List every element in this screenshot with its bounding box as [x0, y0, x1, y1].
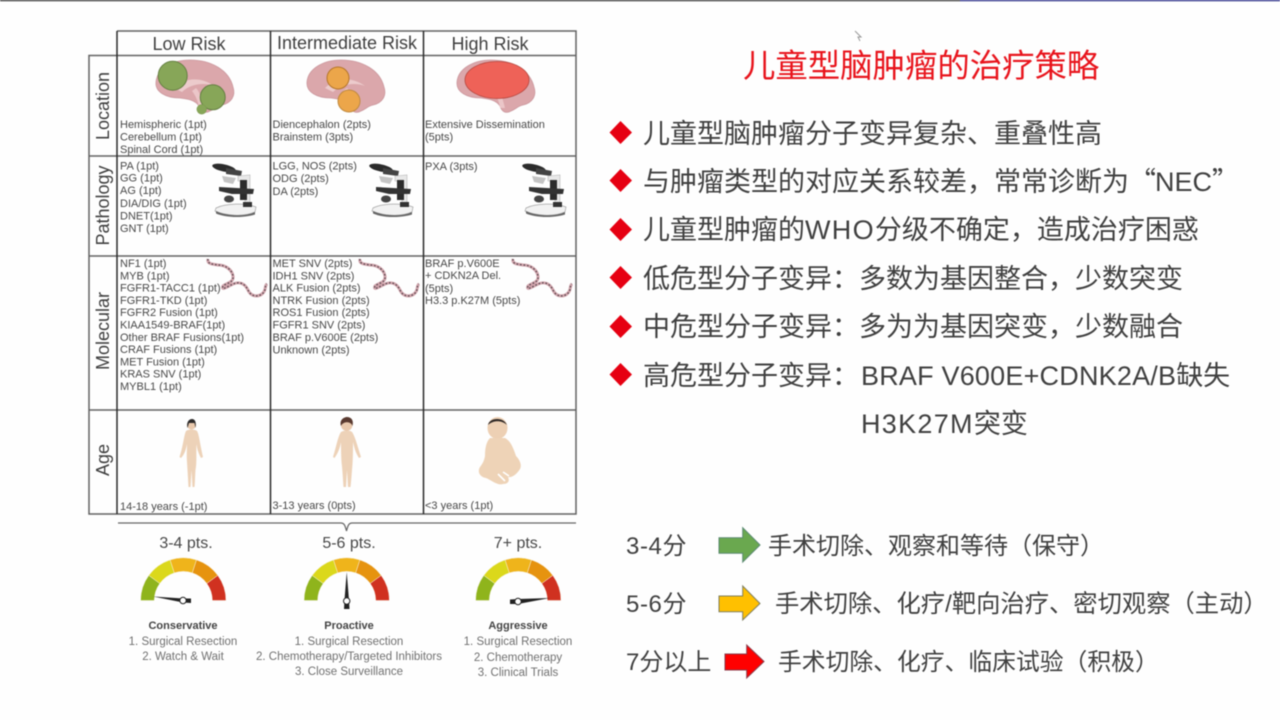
- text: molecular low: [120, 258, 244, 393]
- text: location low: Hemispheric (1pt): [120, 119, 207, 131]
- icon: child figure: [333, 417, 361, 487]
- bullet 6: [610, 361, 1230, 439]
- text: molecular intermediate: FGFR1 SNV (2pts): [272, 320, 365, 332]
- text: molecular intermediate: [272, 258, 378, 356]
- text: location intermediate: [272, 119, 371, 144]
- text: molecular low: Other BRAF Fusions(1pt): [120, 332, 244, 344]
- bullet 6: H3K27M突变: [861, 409, 1028, 439]
- icon: microscope intermediate: [369, 162, 413, 217]
- icon: brain intermediate risk: [307, 60, 385, 112]
- text: location low: Spinal Cord (1pt): [120, 144, 203, 156]
- panel: aggressive outcome: [464, 535, 572, 679]
- brace connecting table to outcomes: [118, 523, 576, 531]
- text: molecular intermediate: BRAF p.V600E (2pts): [272, 332, 378, 344]
- bullet 4: 低危型分子变异：多数为基因整合，少数突变: [643, 264, 1183, 294]
- panel: treatment by score: [626, 528, 1268, 678]
- row: 3-4 score: [626, 528, 1104, 562]
- text: molecular intermediate: NTRK Fusion (2pts): [272, 295, 370, 307]
- text: aggressive treatment: 1. Surgical Resection: [464, 636, 572, 648]
- title: 儿童型脑肿瘤的治疗策略: [743, 48, 1099, 84]
- row: 7+ score: 手术切除、化疗、临床试验（积极）: [778, 649, 1159, 676]
- text: proactive treatment: 1. Surgical Resection: [295, 636, 403, 648]
- text: molecular low: KIAA1549-BRAF(1pt): [120, 320, 225, 332]
- gauge: conservative: [141, 558, 226, 604]
- text: conservative treatment: Conservative: [148, 620, 218, 632]
- icon: DNA strand high: [513, 259, 572, 296]
- text: pathology low: GNT (1pt): [120, 223, 169, 235]
- text: pathology low: GG (1pt): [120, 173, 163, 185]
- text: molecular low: KRAS SNV (1pt): [120, 369, 201, 381]
- text: pathology high: PXA (3pts): [425, 161, 478, 173]
- table grid: [89, 31, 576, 514]
- text: conservative treatment: [129, 620, 237, 663]
- text: molecular low: NF1 (1pt): [120, 258, 166, 270]
- icon: adolescent figure: [180, 419, 203, 487]
- cursor mark: [855, 31, 861, 41]
- column heading: Low Risk: Low Risk: [152, 34, 227, 54]
- bullet 2: 与肿瘤类型的对应关系较差，常常诊断为: [643, 167, 1129, 197]
- bullet 6: BRAF V600E+CDNK2A/B缺失: [861, 361, 1230, 391]
- text: pathology intermediate: ODG (2pts): [272, 173, 329, 185]
- text: aggressive treatment: 3. Clinical Trials: [478, 667, 559, 679]
- text: molecular intermediate: ALK Fusion (2pts): [272, 283, 361, 295]
- bullet 1: 儿童型脑肿瘤分子变异复杂、重叠性高: [643, 119, 1102, 149]
- row: 5-6 score: 5-6分: [626, 591, 687, 618]
- row heading: Age: Age: [93, 444, 113, 476]
- icon: brain high risk: [457, 60, 535, 112]
- row: 5-6 score: 手术切除、化疗/靶向治疗、密切观察（主动）: [775, 591, 1268, 618]
- text: molecular intermediate: Unknown (2pts): [272, 344, 350, 356]
- text: molecular low: CRAF Fusions (1pt): [120, 344, 217, 356]
- bullet 5: 中危型分子变异：多为为基因突变，少数融合: [643, 312, 1183, 342]
- text: proactive treatment: Proactive: [324, 620, 374, 632]
- text: molecular low: FGFR1-TACC1 (1pt): [120, 283, 221, 295]
- bullet 2: NEC: [1155, 167, 1212, 197]
- text: aggressive treatment: Aggressive: [488, 620, 548, 632]
- text: age low: 14-18 years (-1pt): [120, 501, 207, 513]
- bullet 2: ”: [1212, 160, 1239, 199]
- panel: conservative outcome: [129, 535, 237, 663]
- panel: key points: [610, 119, 1239, 439]
- text: location high: (5pts): [425, 132, 453, 144]
- text: proactive treatment: 2. Chemotherapy/Targeted Inhibitors: [256, 651, 442, 663]
- text: pathology low: PA (1pt): [120, 160, 159, 172]
- text: age intermediate: 3-13 years (0pts): [272, 500, 356, 512]
- row heading: Molecular: Molecular: [93, 292, 113, 370]
- icon: microscope high: [522, 162, 566, 217]
- gauge: aggressive: [476, 558, 561, 605]
- text: pathology intermediate: DA (2pts): [272, 186, 318, 198]
- row heading: Location: Location: [93, 72, 113, 140]
- bullet 2: “: [1129, 160, 1156, 199]
- row: 3-4 score: 手术切除、观察和等待（保守）: [768, 533, 1104, 560]
- text: aggressive treatment: 2. Chemotherapy: [474, 652, 562, 664]
- icon: DNA strand intermediate: [360, 259, 419, 296]
- heading: 5-6 pts: 5-6 pts.: [322, 535, 376, 552]
- row: 5-6 score: [626, 586, 1268, 620]
- text: pathology intermediate: [272, 160, 357, 198]
- text: molecular low: MYB (1pt): [120, 270, 170, 282]
- text: molecular low: MET Fusion (1pt): [120, 356, 205, 368]
- gauge: proactive: [304, 558, 389, 609]
- text: location high: [425, 119, 545, 144]
- bullet 2: [610, 160, 1239, 199]
- row: 3-4 score: 3-4分: [626, 533, 687, 560]
- text: molecular intermediate: IDH1 SNV (2pts): [272, 270, 354, 282]
- text: location low: [120, 119, 207, 156]
- column heading: Intermediate Risk: Intermediate Risk: [277, 33, 418, 53]
- column heading: High Risk: High Risk: [451, 34, 530, 54]
- text: pathology low: DIA/DIG (1pt): [120, 198, 187, 210]
- text: molecular high: (5pts): [425, 283, 453, 295]
- text: molecular high: BRAF p.V600E: [425, 258, 500, 270]
- text: molecular low: FGFR1-TKD (1pt): [120, 295, 207, 307]
- text: conservative treatment: 2. Watch & Wait: [142, 651, 225, 663]
- panel: proactive outcome: [256, 535, 442, 678]
- panel: risk scoring table: [89, 31, 576, 514]
- text: molecular intermediate: MET SNV (2pts): [272, 258, 352, 270]
- text: conservative treatment: 1. Surgical Resection: [129, 636, 237, 648]
- text: proactive treatment: [256, 620, 442, 678]
- bullet 6: 高危型分子变异：: [643, 361, 859, 391]
- text: pathology intermediate: LGG, NOS (2pts): [272, 160, 357, 172]
- icon: brain low risk: [156, 60, 234, 114]
- icon: toddler figure: [479, 417, 521, 484]
- heading: 7+ pts: 7+ pts.: [494, 535, 542, 552]
- row: 7+ score: 7分以上: [626, 649, 711, 676]
- text: molecular intermediate: ROS1 Fusion (2pts): [272, 307, 370, 319]
- row heading: Pathology: Pathology: [93, 165, 113, 246]
- text: pathology low: AG (1pt): [120, 185, 162, 197]
- heading: 3-4 pts: 3-4 pts.: [159, 535, 213, 552]
- row: 7+ score: [626, 645, 1159, 678]
- text: molecular low: FGFR2 Fusion (1pt): [120, 307, 218, 319]
- text: age high: <3 years (1pt): [425, 500, 493, 512]
- text: proactive treatment: 3. Close Surveillance: [295, 666, 403, 678]
- text: pathology low: [120, 160, 187, 235]
- icon: DNA strand low: [208, 259, 267, 296]
- bullet 3: 儿童型肿瘤的WHO分级不确定，造成治疗困惑: [643, 215, 1199, 245]
- text: location high: Extensive Dissemination: [425, 119, 545, 131]
- text: molecular high: H3.3 p.K27M (5pts): [425, 295, 520, 307]
- top edge strip: [0, 0, 1280, 1]
- icon: microscope low: [212, 162, 256, 217]
- text: aggressive treatment: [464, 620, 572, 679]
- text: location intermediate: Diencephalon (2pts): [272, 119, 371, 131]
- text: location intermediate: Brainstem (3pts): [272, 132, 353, 144]
- text: molecular high: [425, 258, 520, 307]
- text: pathology low: DNET(1pt): [120, 210, 173, 222]
- text: location low: Cerebellum (1pt): [120, 132, 202, 144]
- text: molecular low: MYBL1 (1pt): [120, 381, 182, 393]
- text: molecular high: + CDKN2A Del.: [425, 270, 501, 282]
